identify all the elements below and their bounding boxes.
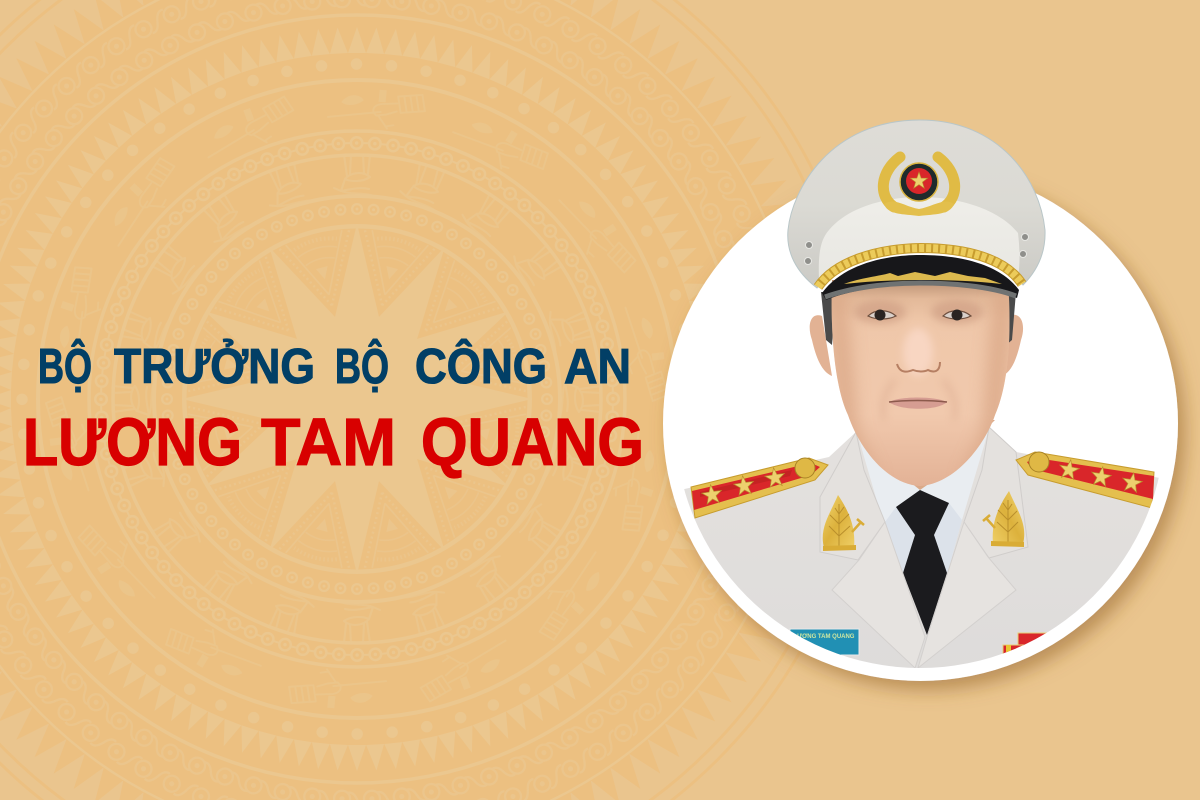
cap crown bbox=[788, 120, 1045, 288]
collar insignia right bbox=[983, 491, 1024, 547]
visor bbox=[822, 255, 1019, 300]
shirt shading bbox=[885, 503, 962, 575]
neck bbox=[914, 420, 995, 490]
portrait: uniform clipped to circle bbox=[684, 420, 1158, 668]
badge disc bbox=[900, 163, 938, 201]
hair sides bbox=[821, 292, 1016, 345]
face shading bbox=[832, 296, 1010, 463]
gold braid bbox=[818, 248, 1022, 287]
nose base bbox=[897, 362, 940, 372]
jacket bbox=[684, 432, 1158, 668]
title line 2: name: LƯƠNG bbox=[23, 405, 242, 480]
title line 2: name bbox=[23, 405, 644, 480]
title line 1: CÔNG bbox=[415, 339, 547, 394]
right eye bbox=[943, 310, 971, 320]
badge wreath bbox=[883, 157, 955, 207]
epaulette right bbox=[1016, 452, 1154, 508]
collar right bbox=[964, 427, 1028, 558]
epaulette left bbox=[691, 458, 828, 518]
name tag bbox=[790, 629, 859, 655]
badge star bbox=[910, 172, 928, 188]
face bbox=[832, 280, 1009, 486]
title line 1: BỘ bbox=[38, 339, 92, 394]
title line 2: name: TAM bbox=[261, 405, 396, 480]
black tie bbox=[896, 490, 949, 635]
title line 1: TRƯỞNG bbox=[114, 339, 315, 394]
title line 1: BỘ bbox=[335, 339, 389, 394]
cap band bbox=[819, 197, 1020, 280]
lapel right bbox=[918, 522, 1016, 668]
nose shading bbox=[903, 328, 933, 376]
collar insignia left bbox=[823, 495, 864, 551]
badge centre bbox=[906, 168, 932, 194]
portrait: white circle frame bbox=[663, 166, 1178, 681]
lapel left bbox=[832, 522, 925, 668]
name tag: LƯƠNG TAM QUANG bbox=[794, 634, 855, 640]
rivets bbox=[804, 234, 1028, 264]
collar left bbox=[820, 432, 885, 560]
medal ribbons bbox=[1002, 632, 1047, 654]
portrait: peaked cap bbox=[788, 120, 1045, 300]
ears bbox=[810, 315, 1023, 376]
portrait: head bbox=[810, 280, 1023, 486]
left eye bbox=[868, 310, 896, 320]
badge ribbon bbox=[884, 202, 954, 216]
title line 1 bbox=[38, 339, 631, 394]
mouth bbox=[889, 398, 947, 409]
visor leaf ornament bbox=[844, 272, 1002, 284]
title line 2: name: QUANG bbox=[421, 405, 644, 480]
title line 1: AN bbox=[564, 340, 631, 394]
cap badge bbox=[883, 157, 955, 216]
shirt bbox=[859, 433, 988, 521]
